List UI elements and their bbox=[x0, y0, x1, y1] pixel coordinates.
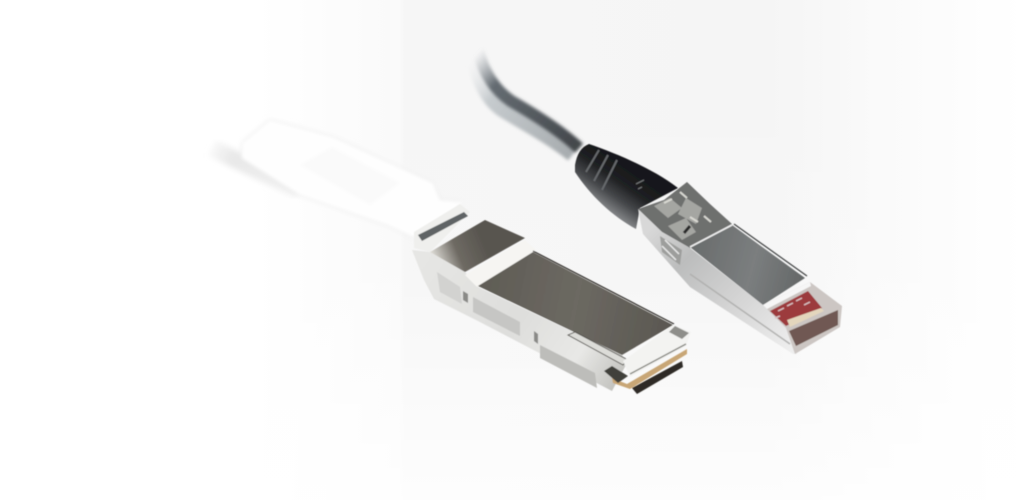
QSFP connector bbox=[412, 204, 691, 394]
open end lower shadow bbox=[789, 310, 838, 346]
cable strand bbox=[478, 50, 579, 148]
main dark plate bbox=[478, 252, 673, 355]
tab outline bbox=[242, 120, 463, 240]
tab window bbox=[300, 147, 400, 205]
metal latch section bbox=[638, 182, 732, 248]
black cable with boot bbox=[474, 50, 678, 229]
lower dark card bbox=[632, 361, 683, 394]
front lip bbox=[763, 282, 811, 309]
side wall of the housing bbox=[412, 250, 627, 391]
collar around tab bbox=[414, 204, 470, 252]
metal clip on plate bbox=[568, 332, 628, 365]
top plate bbox=[690, 225, 805, 305]
knurled lower panel bbox=[540, 345, 597, 388]
moulded boot bbox=[575, 144, 678, 229]
recessed side panel bbox=[473, 297, 520, 336]
board contact strip bbox=[787, 308, 824, 327]
front opening bbox=[763, 282, 842, 354]
white band bbox=[465, 240, 536, 287]
red circuit board bbox=[770, 291, 822, 326]
side wall of the housing bbox=[638, 209, 797, 354]
SFP connector bbox=[638, 182, 842, 354]
tab slot bbox=[418, 212, 468, 241]
tab cable bbox=[212, 148, 300, 190]
rear dark plate bbox=[430, 220, 525, 272]
pull tab, white and fading out bbox=[212, 120, 463, 240]
cable lower highlight bbox=[474, 50, 574, 153]
front end of housing bbox=[623, 325, 691, 377]
gold-edged circuit card bbox=[612, 349, 687, 389]
